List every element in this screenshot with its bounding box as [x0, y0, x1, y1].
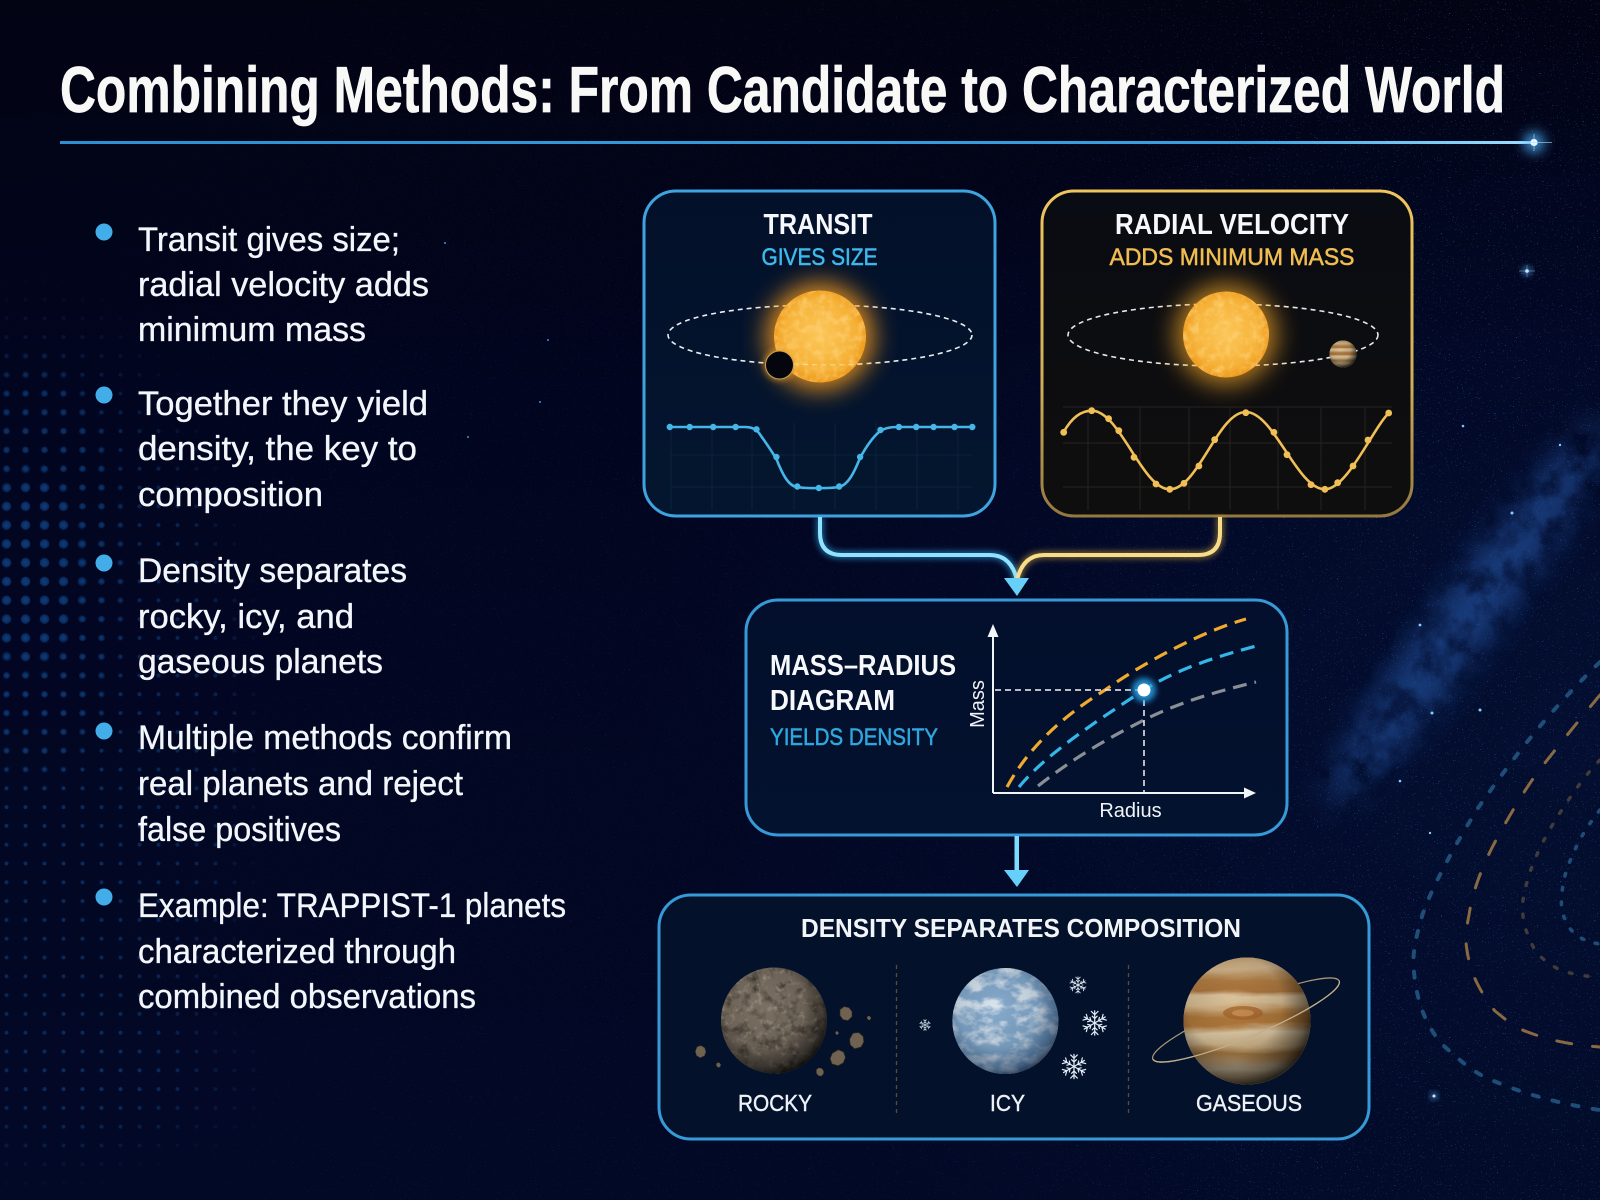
subheading: yields density: YIELDS DENSITY: [770, 724, 938, 751]
bullet 3: gaseous planets: [138, 643, 383, 681]
bullet 3: Density separates: [138, 552, 407, 590]
bullet 1: Transit gives size;: [138, 221, 400, 259]
bullet 3: rocky, icy, and: [138, 598, 354, 636]
arrow: transit and radial velocity merge into diagram: [820, 517, 1220, 596]
bullet 5: characterized through: [138, 933, 456, 971]
label: gaseous: GASEOUS: [1196, 1090, 1302, 1116]
bullet 4: [96, 719, 512, 849]
planet: rocky: [694, 968, 871, 1116]
heading: radial velocity: RADIAL VELOCITY: [1115, 209, 1349, 241]
mass-radius chart: Radius: [1099, 800, 1162, 822]
dotted halftone pattern, left edge: [2, 298, 256, 1184]
star with transiting planet: [668, 282, 972, 390]
panel: mass-radius diagram: [746, 600, 1287, 835]
asteroids: [694, 1007, 871, 1076]
bullet 2: [96, 385, 428, 514]
dashed orbit arcs, lower right: [1413, 662, 1600, 1110]
subheading: adds minimum mass: ADDS MINIMUM MASS: [1110, 244, 1354, 271]
bright stars: [444, 242, 1561, 1100]
bullet 2: density, the key to: [138, 430, 417, 468]
panel: density separates composition: [659, 895, 1369, 1139]
subheading: gives size: GIVES SIZE: [762, 244, 878, 271]
heading: mass-radius diagram: DIAGRAM: [770, 685, 895, 717]
mass-radius chart: Mass: [967, 680, 989, 728]
planet: icy: [919, 968, 1107, 1116]
bullet 2: Together they yield: [138, 385, 428, 423]
bullet 2: composition: [138, 476, 323, 514]
snowflakes: [919, 977, 1107, 1079]
bullet 1: [96, 221, 429, 349]
bullet 4: Multiple methods confirm: [138, 719, 512, 757]
bullet 3: [96, 552, 407, 681]
bullet 5: [96, 887, 566, 1016]
bullet list: [96, 221, 566, 1016]
star with orbiting planet: [1068, 284, 1378, 386]
panel: transit: [644, 191, 995, 516]
heading: density separates composition: DENSITY SEPARATES COMPOSITION: [801, 913, 1241, 943]
bullet 4: real planets and reject: [138, 765, 464, 803]
bullet 5: combined observations: [138, 978, 476, 1016]
bullet 1: radial velocity adds: [138, 266, 429, 304]
bullet 5: Example: TRAPPIST-1 planets: [138, 887, 566, 925]
bullet 1: minimum mass: [138, 311, 366, 349]
radial velocity curve chart: [1060, 407, 1392, 510]
light curve chart: [667, 423, 976, 510]
panel: radial velocity: [1042, 191, 1412, 516]
title rule with star: [60, 132, 1552, 152]
arrow: diagram to composition: [1004, 836, 1029, 887]
heading: mass-radius diagram: [770, 650, 956, 717]
label: rocky: ROCKY: [738, 1090, 812, 1116]
heading: transit: TRANSIT: [764, 209, 873, 241]
mass-radius chart: [967, 619, 1256, 822]
column dividers: [896, 965, 1128, 1116]
label: icy: ICY: [990, 1090, 1025, 1116]
planet: gaseous: [1152, 958, 1340, 1112]
bullet 4: false positives: [138, 811, 341, 849]
heading: mass-radius diagram: MASS–RADIUS: [770, 650, 956, 682]
